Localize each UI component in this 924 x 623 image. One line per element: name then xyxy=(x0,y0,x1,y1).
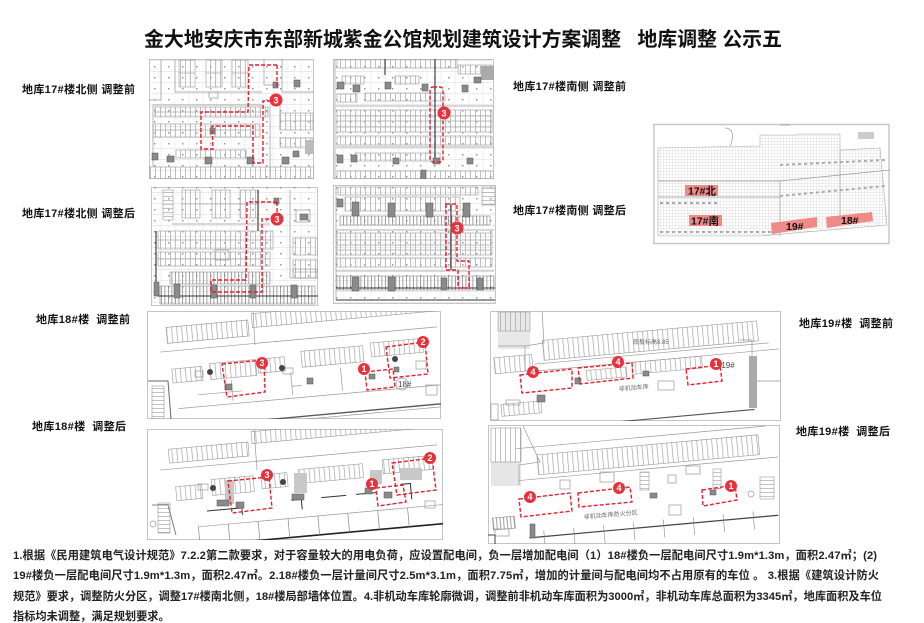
label: 19 before: 地库19#楼 调整前 xyxy=(799,316,893,330)
plan: 17 north after xyxy=(151,187,318,306)
plan frame xyxy=(488,426,780,544)
dashed outline 3 xyxy=(228,477,272,513)
badge 3 xyxy=(438,106,450,120)
marker 17 north: 17#北 xyxy=(688,186,717,198)
parking layout xyxy=(333,185,496,304)
description text xyxy=(13,548,882,623)
badge 1: 1 xyxy=(361,364,367,374)
key plan xyxy=(654,124,890,244)
plan frame xyxy=(334,60,494,178)
plan frame xyxy=(148,430,442,540)
parking layout xyxy=(149,59,314,179)
badge 2: 2 xyxy=(420,337,426,347)
dashed change outline xyxy=(211,202,277,292)
parking layout xyxy=(148,311,441,419)
plan: 18 after xyxy=(147,429,443,540)
plan: 19 before xyxy=(490,311,781,421)
marker 17 south: 17#南 xyxy=(691,214,719,228)
badge 2 xyxy=(424,452,436,464)
plan frame xyxy=(152,188,318,306)
plan frame xyxy=(150,60,314,178)
label: 17 south before: 地库17#楼南侧 调整前 xyxy=(513,79,626,93)
badge 3: 3 xyxy=(264,470,270,480)
dashed outline 1 xyxy=(686,365,722,385)
parking layout xyxy=(150,429,443,540)
label: 17 south after: 地库17#楼南侧 调整后 xyxy=(513,203,626,217)
key plan frame xyxy=(654,124,889,244)
plan: 17 south after xyxy=(333,185,496,304)
badge 4 middle xyxy=(613,482,625,494)
dashed outline 1 xyxy=(376,485,406,506)
dashed outline 2 xyxy=(386,342,428,378)
title: 金大地安庆市东部新城紫金公馆规划建筑设计方案调整 地库调整 公示五 xyxy=(144,27,782,51)
site grid xyxy=(658,125,890,236)
dashed outline 4 middle xyxy=(578,363,633,384)
parking layout: 非机动车库防火分区 xyxy=(583,508,638,521)
badge 3 xyxy=(261,469,273,481)
plan frame xyxy=(334,186,496,304)
parking layout: 非机动车库 xyxy=(618,382,649,393)
badge 2 xyxy=(417,336,429,348)
description text: 指标均未调整，满足规划要求。 xyxy=(13,609,170,623)
badge 3: 3 xyxy=(259,358,265,368)
dashed change outline xyxy=(201,65,277,163)
label: 18 after: 地库18#楼 调整后 xyxy=(32,419,126,433)
badge 1: 1 xyxy=(369,479,375,489)
plan: 18 before xyxy=(147,311,441,419)
description text: 1.根据《民用建筑电气设计规范》7.2.2第二款要求，对于容量较大的用电负荷，应设置配电间，负一层增加配电间（1）18#楼负一层配电间尺寸1.9m*1.3m，面积2.47㎡；(2) xyxy=(13,548,877,562)
badge 3 xyxy=(270,212,284,226)
badge 1 xyxy=(358,363,370,375)
dashed outline 4 left xyxy=(520,369,572,393)
badge 3 xyxy=(256,357,268,369)
badge 4 left xyxy=(524,491,536,503)
dashed outline 4 middle xyxy=(578,487,632,507)
badge 4 middle xyxy=(612,356,624,368)
parking layout xyxy=(486,425,784,553)
marker 18 xyxy=(826,212,873,228)
badge 4 left xyxy=(527,366,539,378)
plan: 17 north before xyxy=(149,59,314,179)
marker 18: 18# xyxy=(841,215,859,227)
parking layout xyxy=(490,311,781,421)
label: 19 after: 地库19#楼 调整后 xyxy=(796,424,890,438)
badge 4 middle: 4 xyxy=(616,483,622,493)
badge 3 xyxy=(450,222,464,234)
plan: 19 after xyxy=(486,425,784,553)
parking layout: 19# xyxy=(721,361,735,370)
badge 4 left: 4 xyxy=(527,492,533,502)
badge 3: 3 xyxy=(441,108,447,118)
label: 17 north after: 地库17#楼北侧 调整后 xyxy=(22,206,135,220)
plan frame xyxy=(490,312,780,420)
plan: 17 south before xyxy=(333,59,494,179)
badge 1 xyxy=(366,478,378,490)
plan frame xyxy=(148,312,440,418)
badge 3: 3 xyxy=(273,96,279,106)
description text: 19#楼负一层配电间尺寸1.9m*1.3m，面积2.47㎡。2.18#楼负一层计量间尺寸2.5m*3.1m，面积7.75㎡，增加的计量间与配电间均不占用原有的车位 。 3.根据《建筑设计防火 xyxy=(13,568,879,582)
badge 3 xyxy=(270,94,282,106)
badge 1: 1 xyxy=(713,359,719,369)
description text: 规范》要求，调整防火分区，调整17#楼南北侧，18#楼局部墙体位置。4.非机动车库轮廓微调，调整前非机动车库面积为3000㎡，非机动车库总面积为3345㎡，地库面积及车位 xyxy=(13,589,882,603)
marker 19: 19# xyxy=(786,221,804,233)
badge 1 xyxy=(710,358,722,370)
dashed outline 2 xyxy=(392,458,436,495)
badge 4 left: 4 xyxy=(530,367,536,377)
dashed outline 1 xyxy=(365,369,395,390)
badge 1: 1 xyxy=(728,481,734,491)
dashed outline 4 left xyxy=(519,493,572,517)
label: 18 before: 地库18#楼 调整前 xyxy=(36,312,130,326)
parking layout: 18# xyxy=(398,380,412,389)
parking layout xyxy=(333,59,494,179)
marker 19 xyxy=(771,217,817,234)
dashed outline 1 xyxy=(702,485,737,506)
dashed change outline xyxy=(446,204,469,288)
badge 1 xyxy=(725,480,737,492)
badge 2: 2 xyxy=(427,453,433,463)
badge 3: 3 xyxy=(274,214,280,224)
badge 3: 3 xyxy=(454,224,460,234)
parking layout: 底板标高8.85 xyxy=(633,338,669,346)
dashed outline 3 xyxy=(222,360,265,397)
dashed change outline xyxy=(430,87,443,162)
parking layout xyxy=(151,187,318,306)
label: 17 north before: 地库17#楼北侧 调整前 xyxy=(22,82,135,96)
badge 4 middle: 4 xyxy=(615,357,621,367)
